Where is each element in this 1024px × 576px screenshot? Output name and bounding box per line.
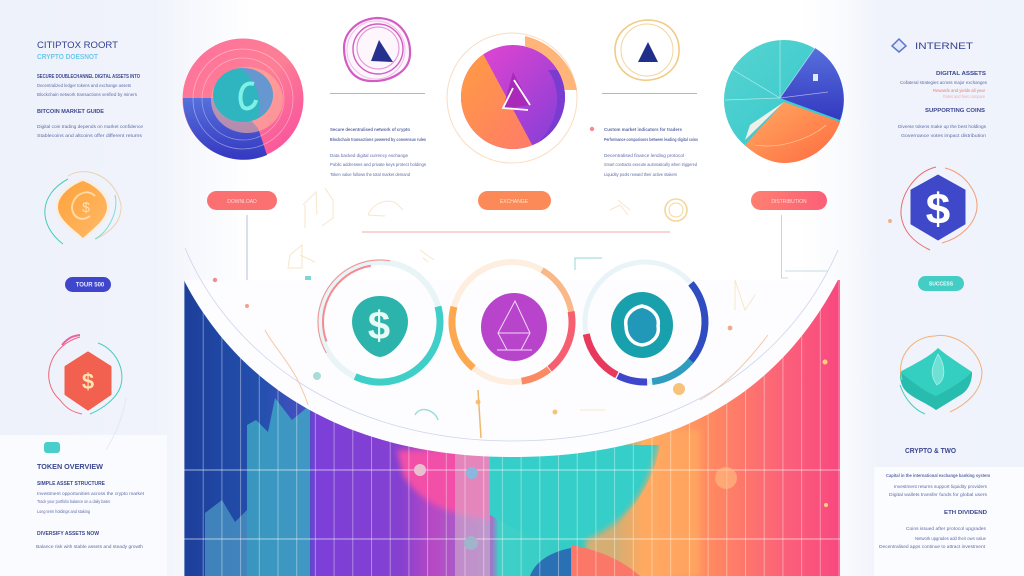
panel: centre-right text block: Liquidity pools reward their active stakers	[604, 172, 678, 177]
panel: bottom left text block: SIMPLE ASSET STRUCTURE	[37, 481, 105, 487]
chart: pink blob	[397, 450, 490, 520]
panel: right column	[800, 0, 1024, 576]
panel: centre-right text block	[604, 127, 698, 177]
icon: teal gem	[900, 335, 982, 414]
chart: data markers	[414, 360, 828, 550]
ring: triangle	[427, 237, 597, 407]
panel: top right text block: DIGITAL ASSETS	[936, 71, 986, 77]
button: coral pill left	[207, 191, 277, 210]
panel: centre-left text block: Blockchain transactions powered by consensus rules	[330, 137, 426, 142]
button: blue pill	[65, 277, 111, 292]
panel: top left text block	[37, 40, 143, 138]
panel: bottom right text block: CRYPTO & TWO	[905, 446, 956, 455]
chart: white bowl overlay	[184, 280, 838, 457]
panel: top right text block: SUPPORTING COINS	[925, 108, 985, 114]
panel: top left text block: SECURE DOUBLECHANNEL DIGITAL ASSETS INTO	[37, 74, 141, 80]
marker: small teal pill	[44, 442, 60, 453]
divider	[330, 92, 425, 94]
panel: centre-right text block: Decentralised finance lending protocol	[604, 153, 684, 158]
button: teal pill: SUCCESS	[929, 282, 954, 288]
icon: pink and blue donut chart	[182, 38, 304, 160]
panel: top right text block	[892, 39, 988, 138]
panel: centre-right text block: Performance comparisons between leading digital coins	[604, 137, 698, 142]
connector: red horizontal	[362, 231, 670, 233]
panel: top right text block: Collateral strategies across major exchanges	[900, 80, 988, 85]
panel: top right text block: Rates and fees compare	[943, 94, 985, 99]
chart: grey column	[455, 450, 490, 576]
panel: top left text block: Digital coin trading depends on market confidence	[37, 124, 143, 129]
panel: bottom left text block: Long term holdings and staking	[37, 509, 90, 514]
panel: bottom left text block	[36, 462, 145, 549]
connector: left vertical	[246, 215, 248, 280]
panel: bottom right text block: Network upgrades add their own value	[915, 536, 986, 541]
button: coral pill right: DISTRIBUTION	[771, 199, 807, 205]
icon: central gradient sphere	[447, 33, 577, 163]
button: orange pill centre	[478, 191, 551, 210]
decor: gold sketches	[265, 188, 768, 410]
panel: bottom right text block: Capital in the international exchange banking system	[886, 473, 990, 478]
badge: dollar: $	[368, 304, 390, 348]
panel: top right text block: Diverse tokens make up the best holdings	[898, 124, 987, 129]
panel: bottom left text block: TOKEN OVERVIEW	[37, 462, 104, 471]
panel: top left text block: Stablecoins and altcoins offer different returns	[37, 133, 143, 138]
button: blue pill: TOUR 500	[76, 282, 105, 288]
icon: orange shield badge	[45, 172, 121, 244]
icon: triangle outline	[497, 301, 532, 350]
icon: coral shield badge: $	[82, 369, 94, 394]
panel: bottom right text block: Digital wallets transfer funds for global users	[889, 492, 988, 497]
bowl inner outline	[185, 248, 838, 441]
icon: blue shield badge: $	[926, 185, 950, 234]
panel: bottom left text block: Investment opportunities across the crypto market	[37, 491, 145, 496]
badge: dollar	[352, 296, 408, 357]
subheading: CRYPTO DOESNOT	[37, 54, 99, 61]
ring: dollar	[295, 237, 465, 407]
chart: dark base shape	[530, 548, 571, 576]
button: coral pill right	[751, 191, 827, 210]
panel: top left text block: BITCOIN MARKET GUIDE	[37, 109, 104, 115]
panel: bottom right text block: Decentralised apps continue to attract investment	[879, 544, 986, 549]
icon: blue shield badge	[888, 167, 977, 250]
divider	[602, 92, 697, 94]
button: teal pill	[918, 276, 964, 291]
connector: right elbow	[782, 215, 828, 278]
chart: orange wash	[585, 430, 700, 576]
chart: pie	[724, 38, 844, 163]
icon: gold ring with triangle	[615, 20, 679, 80]
panel: bottom right text block: ETH DIVIDEND	[944, 510, 987, 516]
chart: teal blob	[490, 445, 660, 530]
panel: bottom left text block: DIVERSIFY ASSETS NOW	[37, 531, 100, 537]
icon: magenta ring with triangle	[344, 18, 410, 81]
chart: grid	[184, 280, 840, 576]
panel: top right text block: INTERNET	[915, 41, 974, 51]
icon label: dollar: $	[82, 199, 90, 215]
chart: left mountain area	[247, 398, 310, 576]
panel: top left text block: Decentralized ledger tokens and exchange assets	[37, 83, 132, 88]
panel: centre-left text block: Public addresses and private keys protect holdings	[330, 162, 427, 167]
panel: centre-left text block: Token value follows the total market demand	[330, 172, 410, 177]
panel: bottom right text block: Investment returns support liquidity providers	[894, 484, 988, 489]
panel: bottom left text block: Balance risk with stable assets and steady growth	[36, 544, 143, 549]
panel: centre-left text block	[330, 127, 427, 177]
panel: left column	[0, 0, 250, 576]
panel: top right text block: Rewards and yields all year	[933, 88, 985, 93]
panel: centre-right text block: Custom market indicators for traders	[604, 127, 682, 132]
icon: coral shield badge	[49, 335, 126, 450]
badge: coin	[611, 292, 673, 358]
panel: centre-left text block: Data backed digital currency exchange	[330, 153, 408, 158]
decor: small dots	[213, 276, 732, 438]
button: orange pill centre: EXCHANGE	[500, 199, 529, 205]
panel: bottom right text block	[879, 446, 990, 549]
panel: bottom right text block: Coins issued after protocol upgrades	[906, 526, 987, 531]
button: coral pill left: DOWNLOAD	[227, 199, 257, 205]
panel: centre-right text block: Smart contracts execute automatically when triggered	[604, 162, 697, 167]
icon: diamond	[892, 39, 906, 52]
panel: top left text block: Blockchain network transactions verified by miners	[37, 92, 138, 97]
heading: CITIPTOX ROORT	[37, 40, 119, 50]
marker: pink dot	[590, 127, 594, 131]
panel: top right text block: Governance votes impact distribution	[901, 133, 986, 138]
ring: coin	[560, 237, 730, 407]
panel: gradient bar chart	[184, 280, 840, 576]
panel: centre-left text block: Secure decentralised network of crypto	[330, 127, 410, 132]
panel: bottom left text block: Track your portfolio balance on a daily basis	[37, 499, 111, 504]
